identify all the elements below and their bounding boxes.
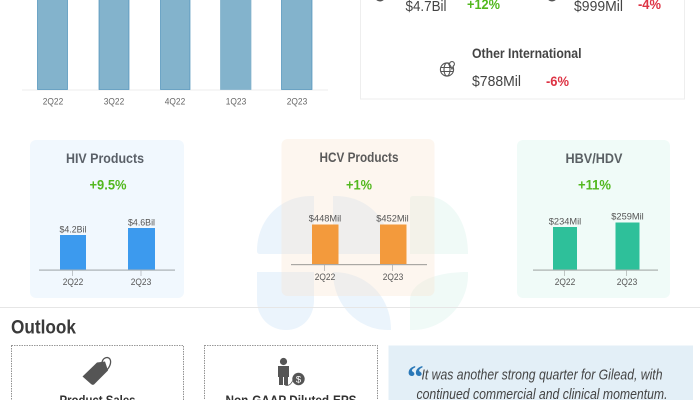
revenue trend bar chart: 2Q23 [287, 96, 307, 106]
bar chart: HBV/HDV: $234Mil [549, 216, 581, 228]
bar chart: HCV: 2Q23 [383, 272, 403, 283]
heading: HCV: HCV Products [320, 150, 398, 165]
revenue trend bar chart: 2Q22 [43, 96, 63, 106]
panel: quote [388, 346, 693, 400]
panel: geographic revenue [360, 0, 684, 99]
icon: person with dollar ball: $ [296, 374, 302, 386]
bar chart: HBV/HDV: 2Q22 [555, 277, 575, 288]
panel: HCV products [282, 139, 434, 296]
bar chart: HBV/HDV: $259Mil [611, 212, 644, 222]
revenue trend bar chart: 4Q22 [165, 96, 185, 106]
change: HCV: +1% [346, 176, 372, 192]
bar chart: HCV: $452Mil [376, 214, 409, 224]
icon: region marker left [374, 0, 386, 2]
heading: HIV: HIV Products [66, 151, 144, 166]
revenue trend bar chart: 1Q23 [226, 96, 246, 106]
icon: person with dollar ball [278, 358, 305, 386]
bar chart: HIV: 2Q23 [131, 277, 151, 288]
panel: HIV products [30, 140, 184, 298]
icon: price tag [82, 358, 111, 385]
icon: region marker right [546, 0, 558, 2]
other international revenue: $788Mil [472, 74, 521, 90]
revenue trend bar chart [22, 0, 328, 106]
bar chart: HCV [291, 214, 427, 283]
bar chart: HBV/HDV [533, 212, 658, 288]
heading: HBV/HDV: HBV/HDV [566, 151, 622, 166]
bar chart: HCV: $448Mil [309, 214, 341, 224]
bar chart: HIV [39, 218, 175, 288]
revenue trend bar chart: 3Q22 [104, 96, 124, 106]
other international heading: Other International [472, 46, 582, 61]
change: HIV: +9.5% [90, 176, 127, 192]
card: product sales [12, 346, 184, 400]
card: non-GAAP EPS [204, 346, 378, 400]
icon: globe with pin [440, 62, 454, 76]
change: HBV/HDV: +11% [578, 176, 612, 192]
watermark logo [257, 196, 468, 330]
icon: quote mark: “ [407, 360, 424, 396]
bar chart: HIV: $4.6Bil [128, 218, 155, 228]
heading: Outlook: Outlook [11, 318, 76, 338]
bar chart: HIV: $4.2Bil [60, 224, 86, 236]
bar chart: HBV/HDV: 2Q23 [617, 277, 637, 288]
panel: HBV/HDV [517, 140, 670, 298]
bar chart: HCV: 2Q22 [315, 272, 335, 283]
quote text: It was another strong quarter for Gilead, with [422, 368, 662, 384]
bar chart: HIV: 2Q22 [63, 277, 83, 288]
other international change: -6% [546, 73, 570, 89]
